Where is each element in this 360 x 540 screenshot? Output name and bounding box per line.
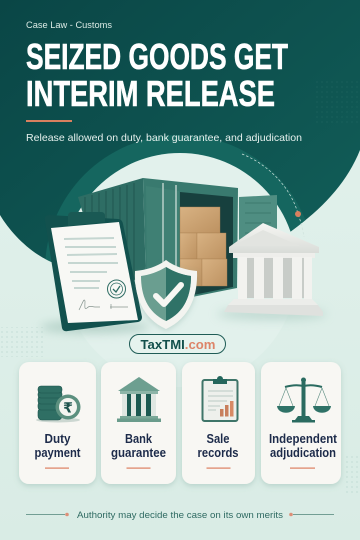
document lines xyxy=(64,238,118,288)
icon: scales xyxy=(277,378,331,422)
container front frame xyxy=(143,178,238,298)
container side xyxy=(78,178,146,283)
subtitle: Release allowed on duty, bank guarantee, and adjudication xyxy=(26,132,302,144)
label: Sale xyxy=(206,432,230,446)
card: duty payment xyxy=(19,362,96,484)
icon: coins and rupee: ₹ xyxy=(63,400,73,416)
dark header shape xyxy=(0,0,360,300)
illustration: bank building xyxy=(217,223,327,320)
label: Bank xyxy=(125,432,152,446)
card: sale records: records xyxy=(198,446,239,460)
interior xyxy=(180,192,233,296)
lighter ring behind container xyxy=(46,135,306,262)
icon: bank xyxy=(117,377,161,422)
illustration: shipping container xyxy=(78,178,277,298)
card: bank guarantee xyxy=(101,362,176,484)
icon: clipboard with bars xyxy=(202,376,238,421)
clipboard clasp xyxy=(68,212,105,226)
dot pattern left xyxy=(0,327,46,357)
illustration: clipboard xyxy=(40,212,150,333)
illustration: shield xyxy=(135,260,197,329)
label: Independent xyxy=(269,432,338,446)
footer note xyxy=(26,510,334,521)
card: bank guarantee: guarantee xyxy=(111,446,166,460)
footer note: Authority may decide the case on its own merits xyxy=(77,510,283,521)
dashed arc with dot xyxy=(242,154,304,237)
card: independent adjudication: adjudication xyxy=(270,446,336,460)
card: duty payment: payment xyxy=(34,446,81,460)
signature xyxy=(79,300,128,310)
kicker: Case Law - Customs xyxy=(26,20,112,31)
dot pattern top right xyxy=(313,80,360,125)
card: sale records xyxy=(182,362,255,484)
dot pattern lower right xyxy=(343,455,360,495)
TaxTMI logo pill xyxy=(130,334,226,354)
TaxTMI logo pill: TaxTMI.com xyxy=(140,337,216,352)
seal xyxy=(108,280,126,298)
left door xyxy=(146,186,179,296)
label: Duty xyxy=(44,432,71,446)
open door xyxy=(239,195,277,272)
card: independent adjudication xyxy=(261,362,341,484)
title accent rule xyxy=(26,120,72,122)
cardboard boxes xyxy=(180,207,227,286)
title: INTERIM RELEASE xyxy=(26,73,275,114)
title xyxy=(26,36,288,114)
pale circle behind container xyxy=(63,153,297,387)
